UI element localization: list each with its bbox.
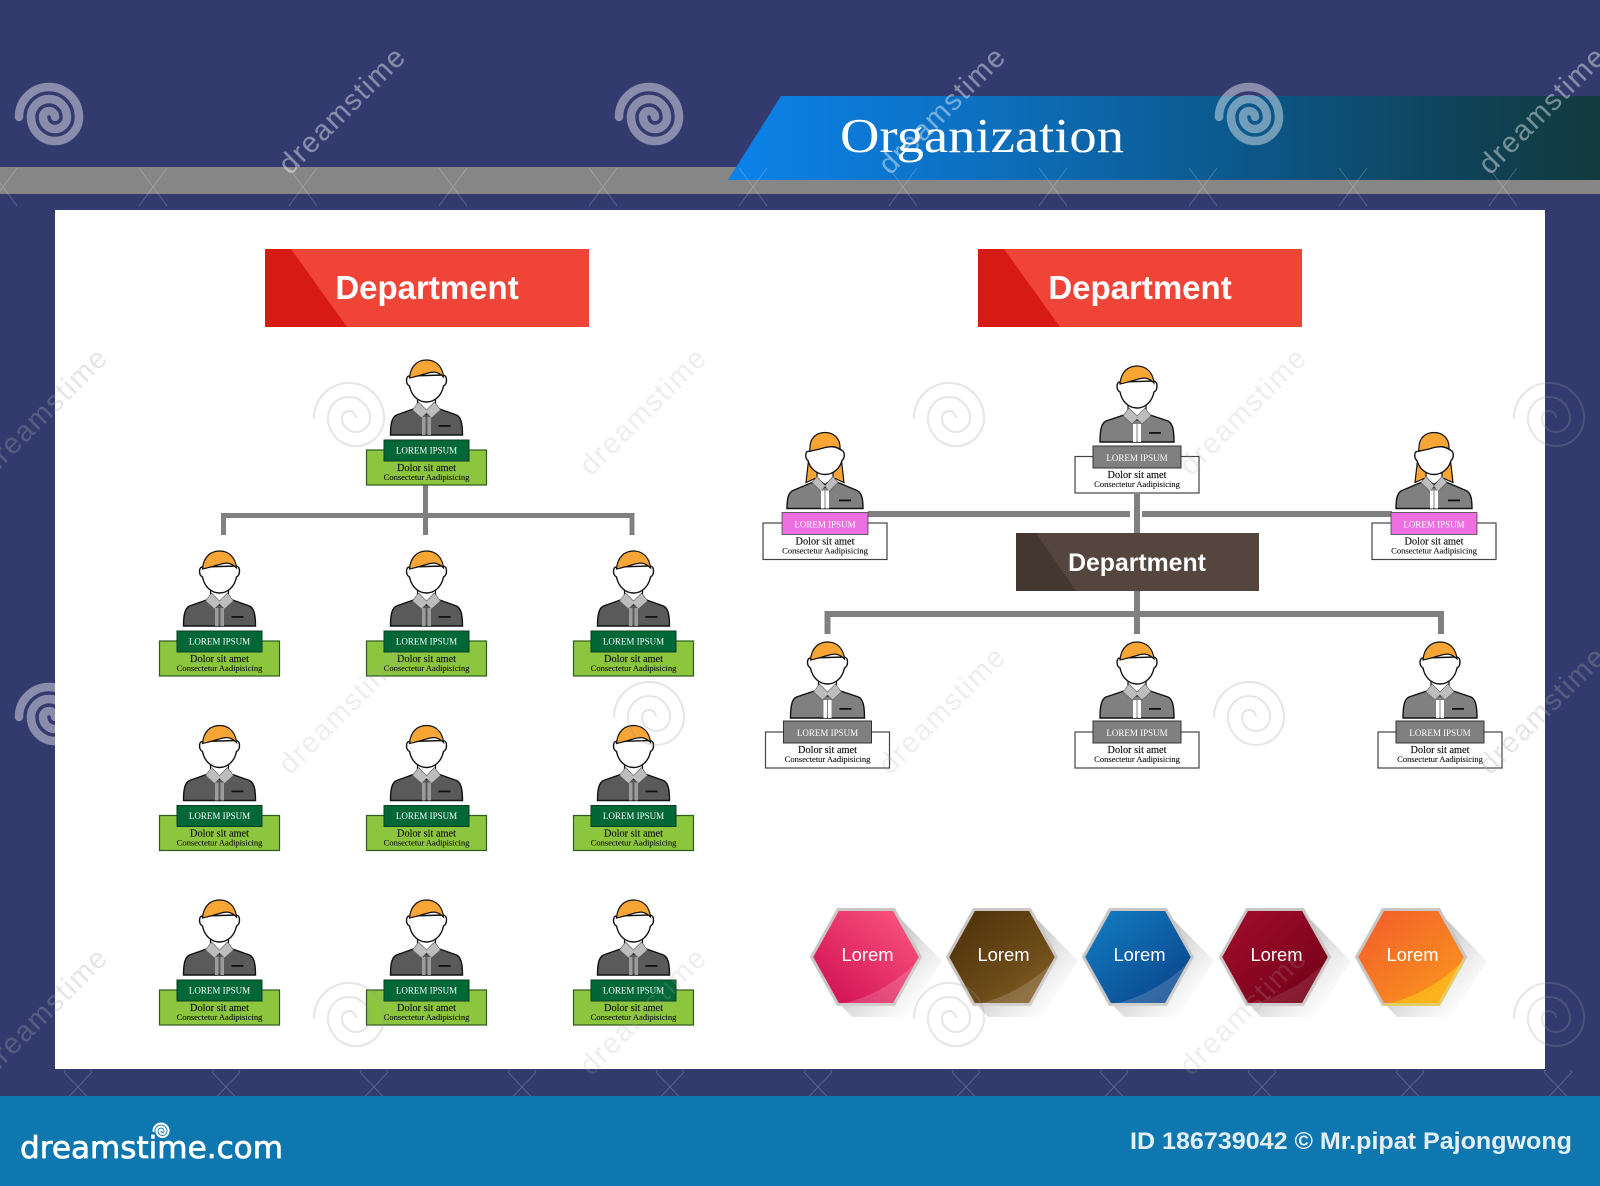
node: left assistant: [763, 432, 887, 560]
heading: left department: Department: [335, 269, 519, 306]
heading: left department: [265, 249, 589, 327]
node: lower centre: Dolor sit amet: [1108, 745, 1167, 756]
footer bar: [0, 1096, 1600, 1186]
node: left assistant: Consectetur Aadipisicing: [782, 546, 869, 556]
node: top director: LOREM IPSUM: [1106, 453, 1168, 463]
panel: right department: [763, 249, 1502, 768]
hexagon: brown: [948, 910, 1078, 1017]
sub-department box: [1016, 533, 1259, 591]
node: row 3 centre: Consectetur Aadipisicing: [384, 1012, 470, 1022]
sub-department box: Department: [1068, 550, 1206, 577]
node: row 1 left: Consectetur Aadipisicing: [177, 663, 263, 673]
node: row 3 left: [160, 900, 280, 1025]
node: lower right: LOREM IPSUM: [1409, 728, 1471, 738]
hexagon: orange: Lorem: [1386, 944, 1439, 965]
watermark: spirals and wordmarks: dreamstime: [573, 941, 714, 1082]
hexagon: pink: Lorem: [841, 944, 894, 965]
hexagon: orange: [1356, 910, 1487, 1017]
node: right assistant: Consectetur Aadipisicing: [1391, 546, 1478, 556]
node: row 3 centre: Dolor sit amet: [397, 1003, 456, 1014]
heading: right department: Department: [1048, 269, 1232, 306]
hexagon legend: [812, 910, 1487, 1017]
node: top manager: Dolor sit amet: [397, 463, 456, 474]
node: row 1 centre: [366, 551, 486, 676]
node: top director: [1075, 366, 1199, 493]
node: row 3 left: LOREM IPSUM: [189, 986, 250, 996]
node: lower right: Dolor sit amet: [1411, 745, 1470, 756]
node: row 1 right: [574, 551, 694, 676]
node: row 2 right: [574, 726, 694, 850]
watermark: spirals and wordmarks: dreamstime: [1173, 341, 1314, 482]
hexagon: crimson: Lorem: [1250, 944, 1303, 965]
grey title strip: [0, 167, 1600, 194]
node: row 3 right: Dolor sit amet: [604, 1003, 663, 1014]
lower band crosses: [0, 1070, 1600, 1096]
node: row 3 centre: LOREM IPSUM: [396, 986, 457, 996]
node: top manager: [366, 360, 486, 485]
node: row 2 centre: LOREM IPSUM: [396, 811, 457, 821]
node: lower centre: Consectetur Aadipisicing: [1094, 754, 1181, 764]
node: row 3 left: Dolor sit amet: [190, 1003, 249, 1014]
title banner: [728, 96, 1600, 180]
watermark: spirals and wordmarks: dreamstime: [272, 40, 413, 181]
node: top manager: Consectetur Aadipisicing: [384, 472, 470, 482]
node: row 1 centre: Consectetur Aadipisicing: [384, 663, 470, 673]
node: row 3 right: [574, 900, 694, 1025]
node: lower left: LOREM IPSUM: [797, 728, 858, 738]
node: row 2 centre: [366, 726, 486, 850]
node: row 1 left: [160, 551, 280, 676]
node: row 2 right: Consectetur Aadipisicing: [591, 838, 677, 848]
hexagon: crimson: [1220, 910, 1351, 1017]
hexagon: blue: Lorem: [1113, 944, 1166, 965]
node: top director: Dolor sit amet: [1108, 470, 1167, 481]
watermark: spirals and wordmarks: dreamstime: [872, 40, 1013, 181]
hexagon: pink: [812, 910, 942, 1017]
node: row 3 right: Consectetur Aadipisicing: [591, 1012, 677, 1022]
node: lower left: Consectetur Aadipisicing: [785, 754, 871, 764]
node: lower left: [766, 642, 890, 768]
strip crosses: [0, 168, 1600, 208]
watermark: spirals and wordmarks: dreamstime: [1173, 941, 1314, 1082]
node: row 1 left: LOREM IPSUM: [189, 636, 250, 646]
heading: right department: [978, 249, 1302, 327]
node: right assistant: LOREM IPSUM: [1403, 520, 1465, 530]
node: right assistant: Dolor sit amet: [1405, 536, 1464, 548]
node: row 2 centre: Dolor sit amet: [397, 828, 456, 840]
node: left assistant: LOREM IPSUM: [794, 520, 856, 530]
connector lines: right chart: [828, 494, 1441, 634]
node: row 2 left: Dolor sit amet: [190, 828, 249, 840]
node: row 1 left: Dolor sit amet: [190, 654, 249, 665]
node: row 1 right: Consectetur Aadipisicing: [591, 663, 677, 673]
watermark: spirals and wordmarks: dreamstime: [272, 640, 413, 781]
footer credit: ID 186739042 © Mr.pipat Pajongwong: [1130, 1128, 1572, 1155]
node: top manager: LOREM IPSUM: [396, 446, 457, 456]
node: row 3 left: Consectetur Aadipisicing: [177, 1012, 263, 1022]
node: row 2 left: Consectetur Aadipisicing: [177, 838, 263, 848]
title: Organization: [840, 108, 1124, 163]
node: row 2 left: LOREM IPSUM: [189, 811, 250, 821]
panel: left department: [160, 249, 694, 1025]
node: row 3 right: LOREM IPSUM: [603, 986, 664, 996]
watermark: spirals and wordmarks: dreamstime: [872, 640, 1013, 781]
node: row 1 right: LOREM IPSUM: [603, 636, 664, 646]
node: row 1 centre: LOREM IPSUM: [396, 636, 457, 646]
node: lower left: Dolor sit amet: [798, 745, 857, 756]
node: row 2 left: [160, 726, 280, 850]
footer logo: dreamstime.com: [20, 1131, 283, 1166]
hexagon: brown: Lorem: [977, 944, 1030, 965]
node: top director: Consectetur Aadipisicing: [1094, 479, 1181, 489]
node: row 2 right: Dolor sit amet: [604, 828, 663, 840]
node: row 3 centre: [366, 900, 486, 1025]
white content panel: [55, 210, 1545, 1069]
node: row 1 centre: Dolor sit amet: [397, 654, 456, 665]
node: row 2 right: LOREM IPSUM: [603, 811, 664, 821]
node: left assistant: Dolor sit amet: [796, 536, 855, 548]
hexagon: blue: [1084, 910, 1214, 1017]
node: lower centre: LOREM IPSUM: [1106, 728, 1168, 738]
node: lower centre: [1075, 642, 1199, 768]
node: row 1 right: Dolor sit amet: [604, 654, 663, 665]
node: lower right: Consectetur Aadipisicing: [1397, 754, 1484, 764]
connector lines: left chart: [224, 485, 632, 535]
node: row 2 centre: Consectetur Aadipisicing: [384, 838, 470, 848]
node: lower right: [1378, 642, 1502, 768]
node: right assistant: [1372, 432, 1496, 560]
watermark: spirals and wordmarks: dreamstime: [573, 341, 714, 482]
